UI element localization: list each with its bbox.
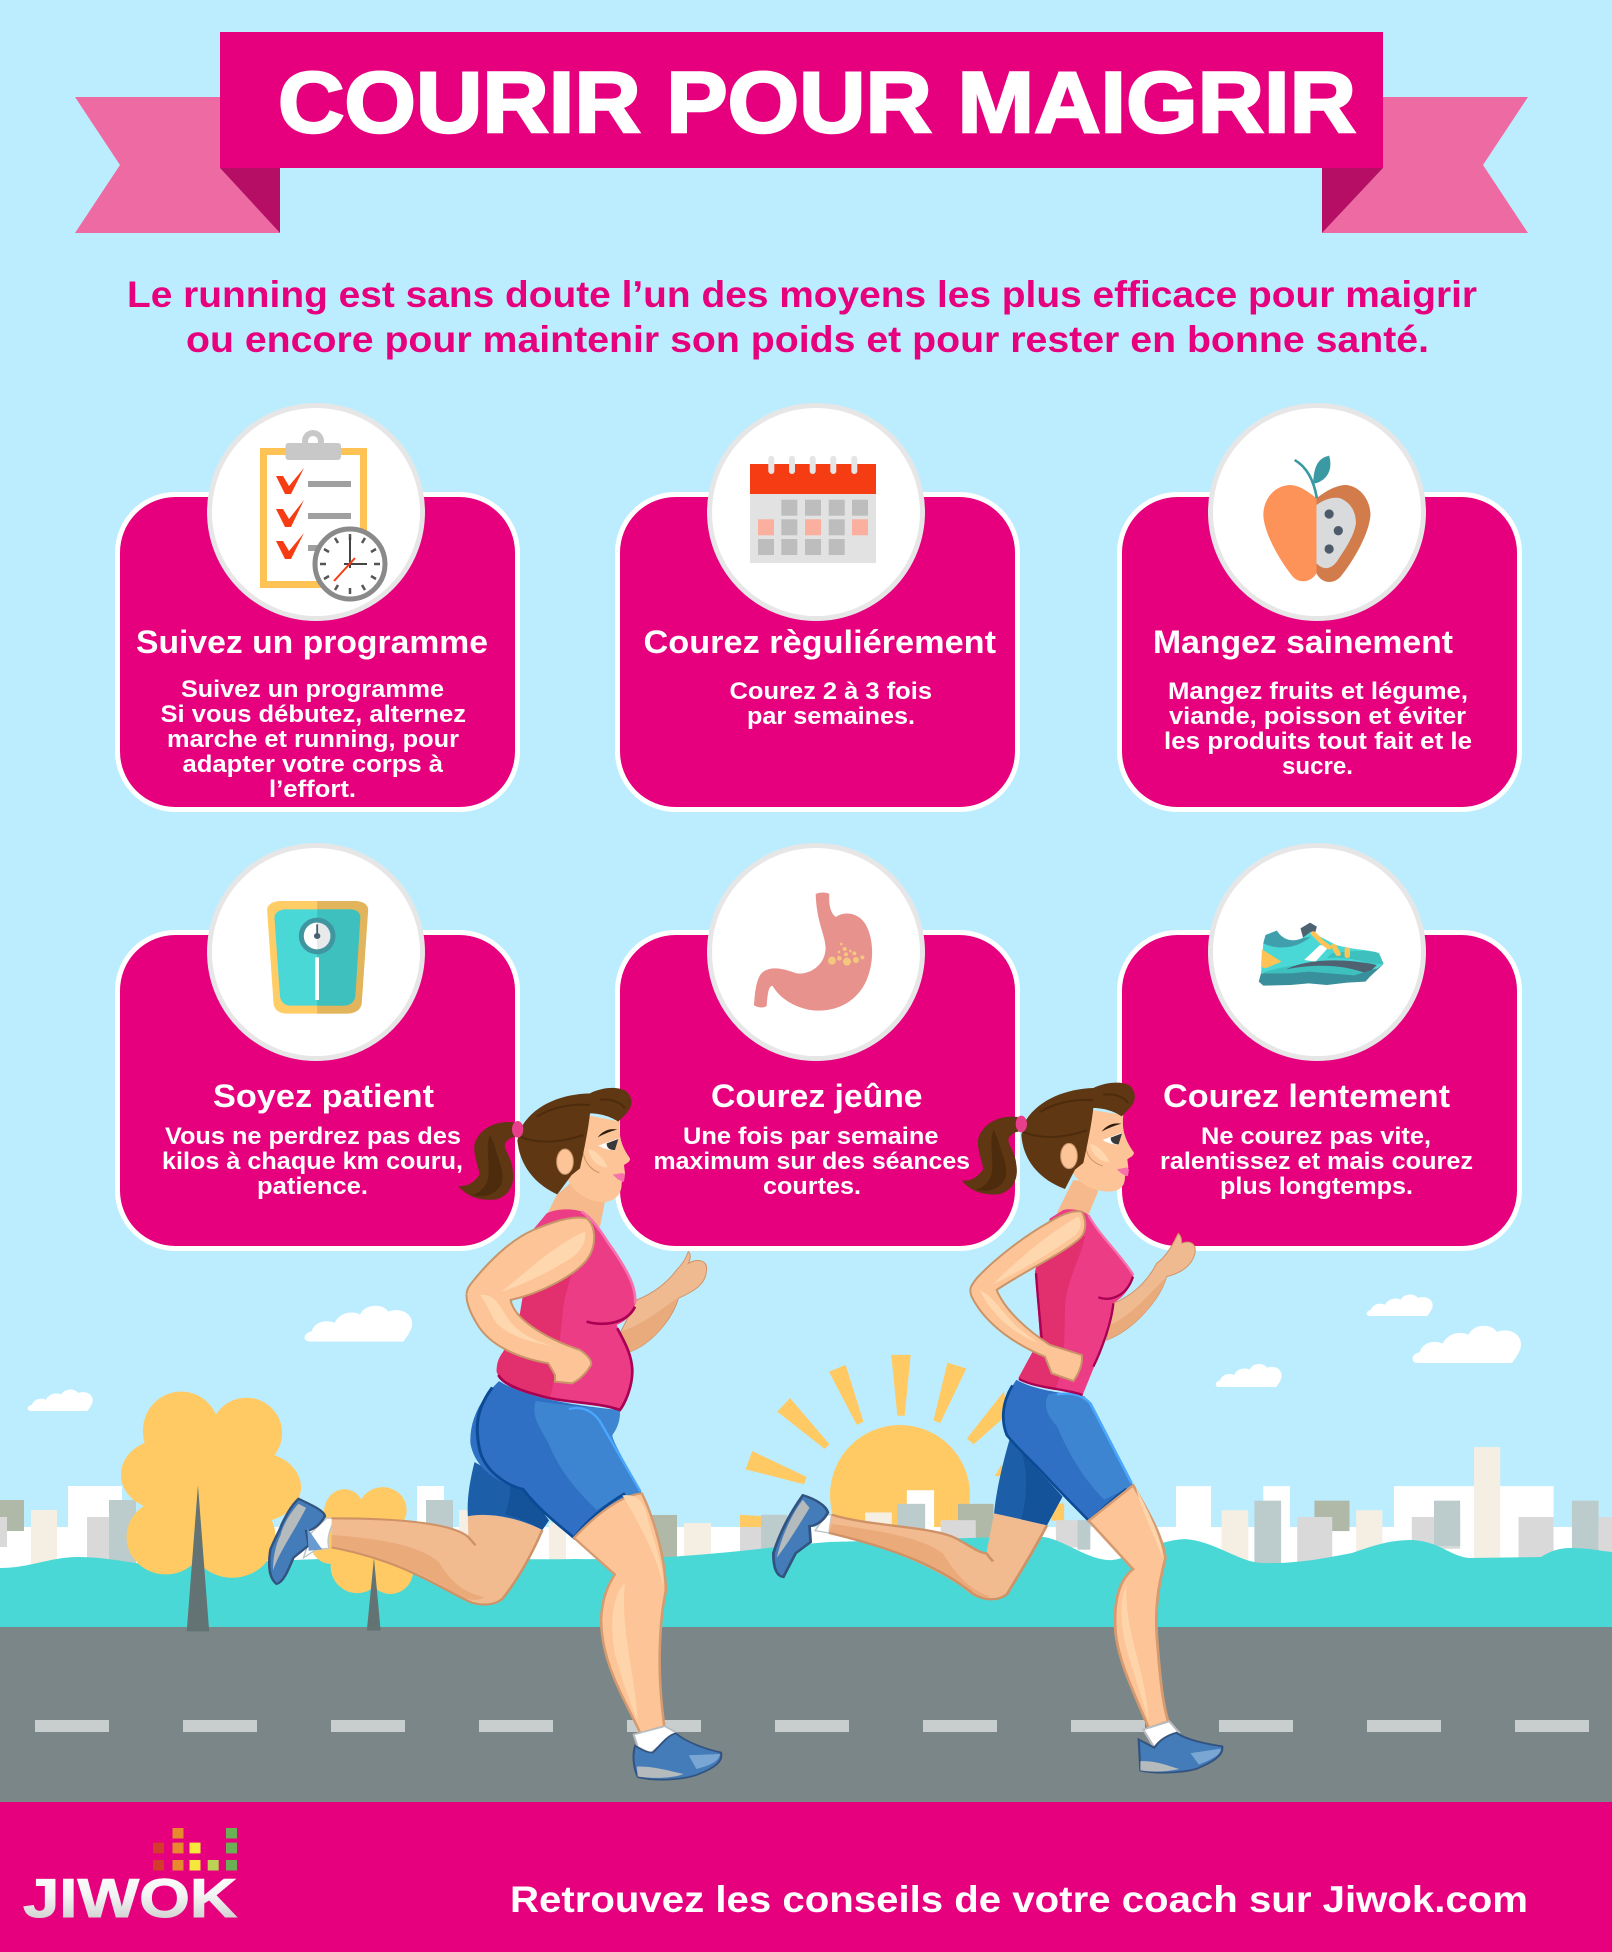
body text: l’effort.	[269, 776, 356, 803]
body text: adapter votre corps à	[182, 751, 444, 778]
icon: running shoe	[1259, 923, 1384, 986]
tree trunks	[187, 1485, 381, 1631]
heading: Suivez un programme	[136, 624, 488, 660]
body text: plus longtemps.	[1220, 1173, 1413, 1200]
sun	[740, 1355, 1064, 1565]
body text: ralentissez et mais courez	[1160, 1148, 1473, 1175]
body text: Suivez un programme	[181, 676, 444, 703]
logo: Jiwok: JIWOK	[23, 1867, 237, 1929]
runner: after, slim woman	[773, 1083, 1222, 1773]
body text	[160, 676, 466, 803]
clouds	[28, 1294, 1521, 1411]
city skyline	[0, 1447, 1612, 1637]
icon: apple	[1263, 456, 1370, 582]
runner: before, heavier woman	[269, 1088, 721, 1780]
body text: Courez 2 à 3 fois	[730, 678, 932, 705]
hills	[0, 1537, 1612, 1640]
body text: Une fois par semaine	[683, 1123, 938, 1150]
body text: par semaines.	[747, 703, 915, 730]
intro text: ou encore pour maintenir son poids et pour rester en bonne santé.	[186, 319, 1429, 360]
body text: maximum sur des séances	[654, 1148, 970, 1175]
upper body	[458, 1088, 635, 1410]
body text: kilos à chaque km couru,	[162, 1148, 463, 1175]
body text	[1160, 1123, 1473, 1200]
icon: clipboard and clock	[264, 430, 385, 599]
body text	[162, 1123, 463, 1200]
panel: courez lentement	[1120, 846, 1520, 1248]
body text: les produits tout fait et le	[1164, 728, 1472, 755]
body text	[730, 678, 932, 730]
icon: bathroom scale	[267, 901, 368, 1014]
heading: Courez jeûne	[711, 1078, 922, 1114]
body text: courtes.	[763, 1173, 861, 1200]
footer band	[0, 1802, 1612, 1952]
panel: mangez sainement	[1120, 406, 1520, 810]
intro text	[127, 274, 1477, 360]
icon: calendar	[750, 456, 876, 563]
body text: sucre.	[1282, 753, 1353, 780]
logo: Jiwok	[23, 1828, 237, 1929]
footer text: Retrouvez les conseils de votre coach sur Jiwok.com	[510, 1879, 1528, 1920]
legs and shorts	[773, 1380, 1222, 1773]
body text: Vous ne perdrez pas des	[165, 1123, 461, 1150]
panel: soyez patient	[118, 846, 518, 1248]
road	[0, 1627, 1612, 1802]
heading: Courez règuliérement	[644, 624, 996, 660]
body text: Ne courez pas vite,	[1201, 1123, 1431, 1150]
title: COURIR POUR MAIGRIR	[278, 55, 1356, 151]
back arm	[620, 1252, 707, 1352]
upper body	[962, 1083, 1135, 1395]
body text	[1164, 678, 1472, 780]
heading: Soyez patient	[213, 1078, 434, 1114]
panel: courez jeune	[618, 846, 1018, 1248]
title ribbon	[75, 32, 1528, 233]
body text	[654, 1123, 970, 1200]
heading: Mangez sainement	[1153, 624, 1453, 660]
intro text: Le running est sans doute l’un des moyens les plus efficace pour maigrir	[127, 274, 1477, 315]
body text: Si vous débutez, alternez	[160, 701, 466, 728]
tree large	[121, 1391, 301, 1578]
panel: suivez un programme	[118, 406, 518, 810]
tree small	[311, 1487, 413, 1594]
icon: stomach	[754, 892, 872, 1011]
body text: viande, poisson et éviter	[1169, 703, 1466, 730]
heading: Courez lentement	[1163, 1078, 1450, 1114]
back arm	[1107, 1233, 1195, 1340]
body text: patience.	[257, 1173, 368, 1200]
legs and shorts	[269, 1381, 721, 1780]
body text: Mangez fruits et légume,	[1168, 678, 1468, 705]
body text: marche et running, pour	[167, 726, 459, 753]
panel: courez regulierement	[618, 406, 1018, 810]
